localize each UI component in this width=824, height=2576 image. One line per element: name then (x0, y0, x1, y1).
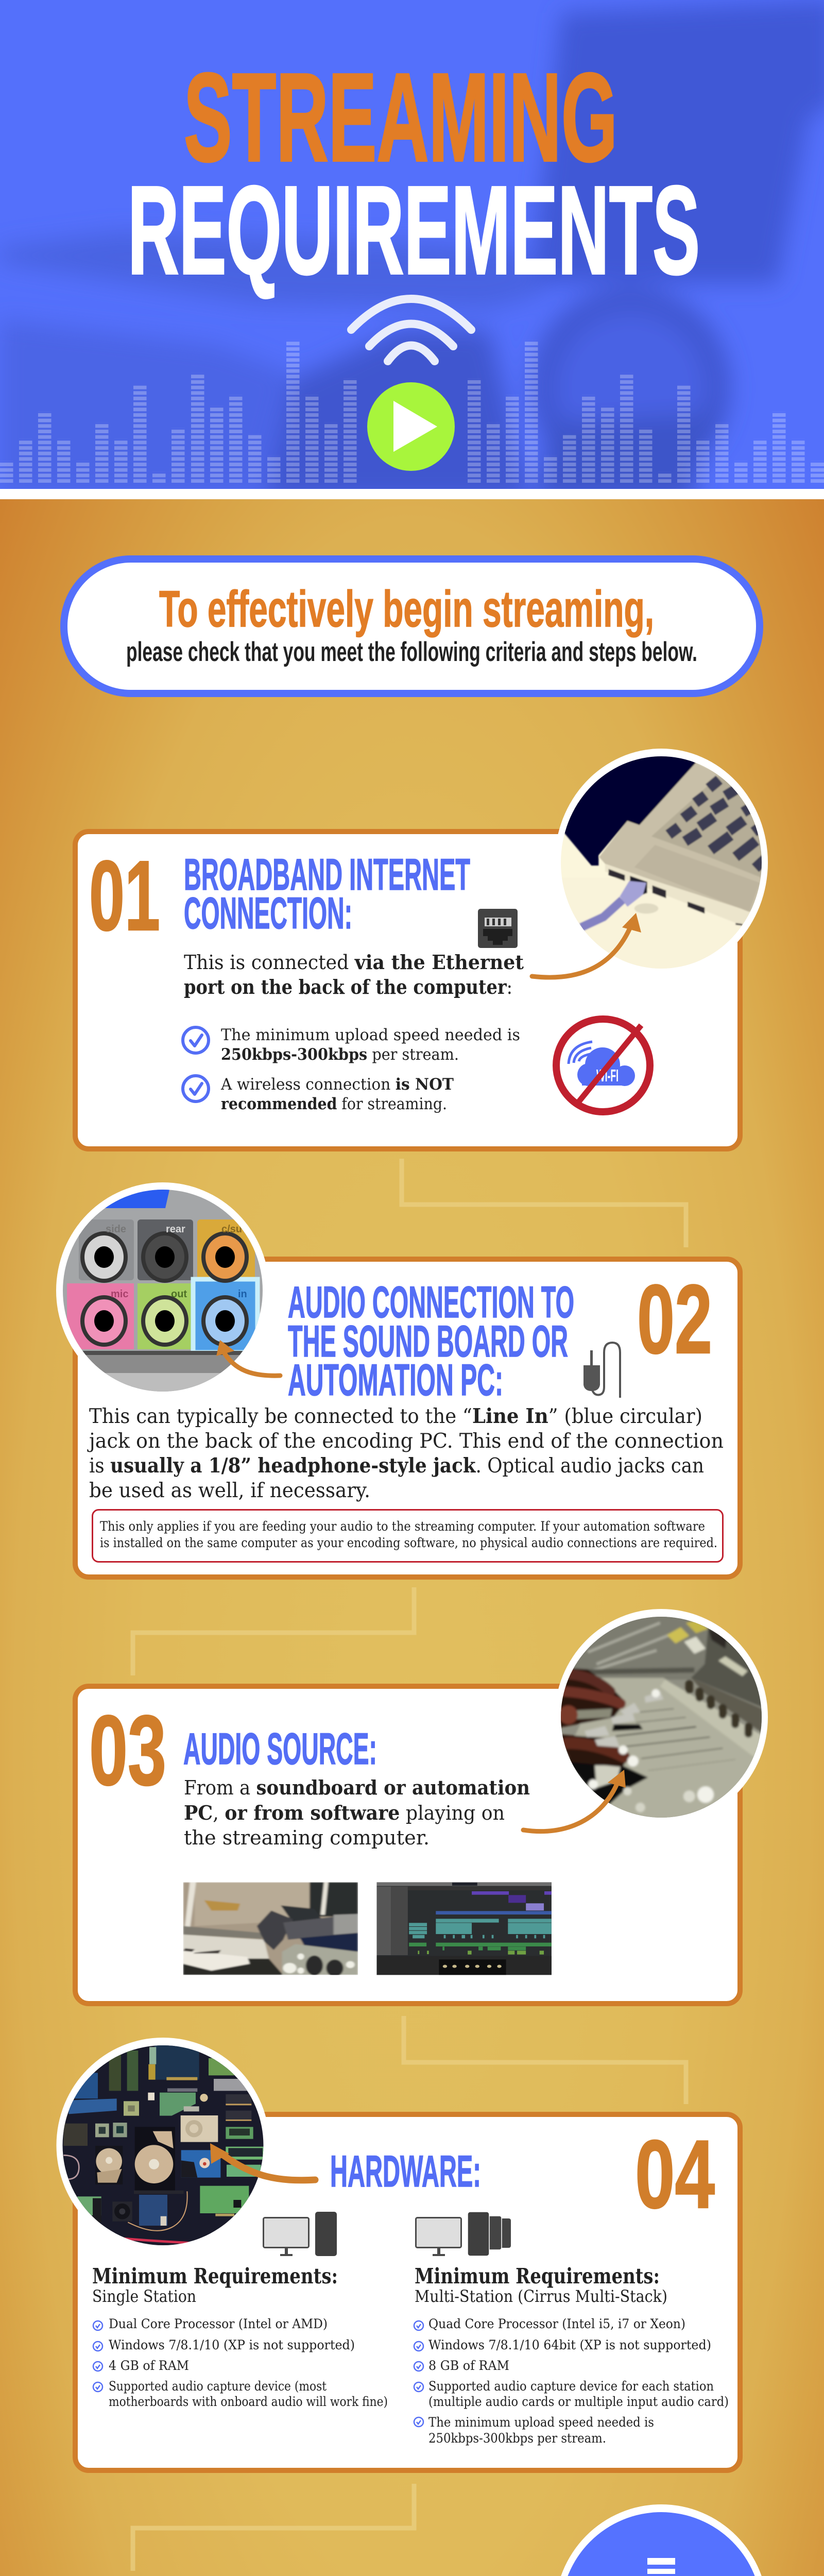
text: audio source description: From a soundboard or automation (184, 1776, 530, 1799)
column: single station requirements: Supported audio capture device (most (109, 2379, 327, 2394)
heading: broadband: CONNECTION: (184, 889, 352, 938)
column: single station requirements: Windows 7/8.1/10 (XP is not supported) (109, 2337, 355, 2352)
column: multi-station requirements: Minimum Requirements: (415, 2264, 660, 2289)
photo: laptop ethernet port (558, 749, 768, 969)
column: single station requirements: motherboards with onboard audio will work fine) (109, 2394, 388, 2409)
photo: audio jacks: mic (111, 1289, 128, 1300)
heading: broadband: BROADBAND INTERNET (184, 850, 470, 900)
icon: check upload speed (183, 1027, 209, 1053)
icon: single computer (264, 2212, 337, 2256)
callout: automation note (93, 1510, 723, 1562)
arrow to line in jack (216, 1340, 280, 1376)
panel: intro pill (64, 559, 760, 693)
callout: automation note: This only applies if you are feeding your audio to the streaming computer. If your automation software (100, 1519, 705, 1534)
white divider band (0, 489, 824, 499)
photo: audio jacks (56, 1182, 269, 1399)
step number 01: 01 (89, 840, 160, 951)
column: single station requirements (92, 2264, 388, 2409)
panel: step 05 encoder (75, 2504, 768, 2576)
column: multi-station requirements: (multiple audio cards or multiple input audio card) (428, 2394, 729, 2409)
step number 02: 02 (637, 1265, 712, 1374)
photo: headphones and interface (183, 1882, 358, 1977)
bullet: upload speed: The minimum upload speed needed is (221, 1026, 520, 1044)
bullet: upload speed: 250kbps-300kbps per stream. (221, 1045, 459, 1064)
column: multi-station requirements: Windows 7/8.1/10 64bit (XP is not supported) (428, 2337, 711, 2352)
heading: audio connection: THE SOUND BOARD OR (288, 1317, 568, 1366)
heading: audio connection: AUTOMATION PC: (288, 1355, 503, 1405)
bullet: upload speed (221, 1026, 520, 1064)
photo: mixing board (554, 1607, 775, 1825)
bullet: wireless not recommended: recommended for streaming. (221, 1095, 447, 1113)
photo: audio jacks: out (171, 1289, 187, 1300)
text: audio source description (184, 1776, 530, 1849)
text: ethernet connection (184, 951, 524, 998)
icon: download circle (555, 2504, 768, 2576)
icon: wifi signal (351, 299, 471, 361)
equalizer bars (0, 340, 824, 483)
photo: audio jacks: c/su (221, 1224, 242, 1235)
arrow to mixing board (523, 1770, 626, 1832)
check icons: single station list (93, 2321, 102, 2392)
column: multi-station requirements: Supported audio capture device for each station (428, 2379, 714, 2394)
heading: broadband (184, 850, 470, 938)
column: multi-station requirements: The minimum upload speed needed is (428, 2415, 654, 2430)
icon: headphone jack (583, 1343, 620, 1398)
panel: step 04 hardware (57, 2038, 740, 2470)
heading: audio connection: AUDIO CONNECTION TO (288, 1278, 574, 1327)
heading: audio connection (288, 1278, 574, 1405)
photo: audio jacks: in (238, 1289, 247, 1300)
panel: step 01 broadband (75, 747, 775, 1149)
check icons: multi-station list (414, 2321, 423, 2427)
icon: ethernet socket (478, 909, 518, 948)
text: line in description: jack on the back of the encoding PC. This end of the connection (87, 1430, 724, 1453)
column: single station requirements: Single Station (92, 2286, 196, 2306)
column: multi-station requirements: 8 GB of RAM (428, 2358, 509, 2373)
text: audio source description: the streaming computer. (184, 1826, 430, 1849)
step number 03: 03 (89, 1694, 166, 1806)
column: multi-station requirements: Quad Core Processor (Intel i5, i7 or Xeon) (428, 2316, 685, 2331)
panel: step 03 audio source (75, 1607, 775, 2004)
panel: step 02 audio connection (56, 1182, 740, 1577)
callout: automation note: is installed on the same computer as your encoding software, no physical audio connections are required. (100, 1535, 717, 1550)
icon: multi-station computers (416, 2212, 511, 2256)
screenshot: audio editing software (376, 1882, 552, 1975)
text: line in description: This can typically be connected to the “Line In” (blue circular) (89, 1404, 702, 1428)
text: ethernet connection: This is connected via the Ethernet (184, 951, 524, 974)
bullet: wireless not recommended (220, 1075, 454, 1113)
photo: computer components (57, 2038, 270, 2253)
photo: audio jacks: side (106, 1224, 126, 1235)
arrow to components (210, 2143, 315, 2180)
photo: audio jacks: rear (166, 1224, 185, 1235)
panel: header banner (0, 0, 824, 500)
step number 04: 04 (635, 2120, 715, 2228)
icon: no wifi: WI-FI (596, 1066, 619, 1085)
text: audio source description: PC, or from software playing on (184, 1801, 505, 1824)
bullet: wireless not recommended: A wireless connection is NOT (220, 1075, 454, 1094)
column: single station requirements: Minimum Requirements: (92, 2264, 338, 2289)
icon: no wifi (556, 1019, 650, 1112)
icon: check wireless (183, 1076, 209, 1101)
icon: play button (367, 382, 455, 471)
text: line in description (87, 1404, 724, 1502)
column: single station requirements: 4 GB of RAM (109, 2358, 189, 2373)
column: single station requirements: Dual Core Processor (Intel or AMD) (109, 2316, 328, 2331)
column: multi-station requirements (414, 2264, 729, 2446)
column: multi-station requirements: Multi-Station (Cirrus Multi-Stack) (415, 2286, 667, 2306)
arrow to ethernet port (532, 913, 641, 977)
heading: audio source: AUDIO SOURCE: (183, 1724, 377, 1774)
text: ethernet connection: port on the back of the computer: (184, 975, 512, 998)
text: line in description: be used as well, if necessary. (89, 1479, 370, 1502)
heading: hardware: HARDWARE: (330, 2147, 481, 2196)
column: multi-station requirements: 250kbps-300kbps per stream. (428, 2431, 606, 2446)
text: line in description: is usually a 1/8” headphone-style jack. Optical audio jacks can (89, 1454, 704, 1478)
